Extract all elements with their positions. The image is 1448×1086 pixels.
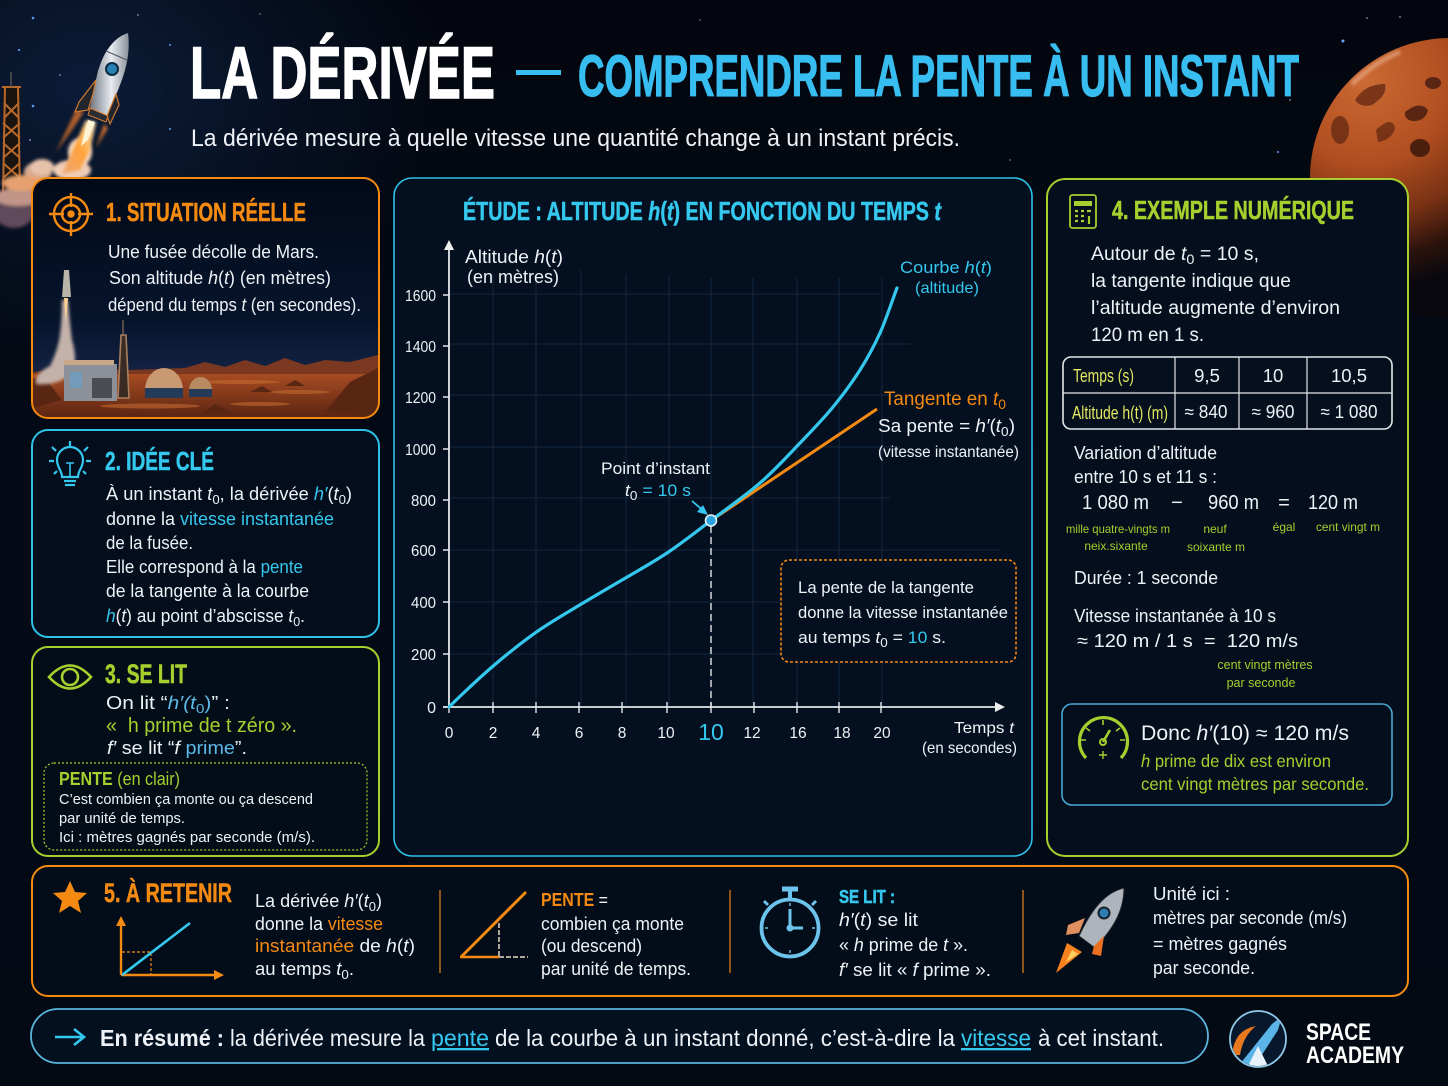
callout: pente en clair: C’est combien ça monte ou ça descend [59, 791, 313, 808]
y axis: 1400 [405, 339, 436, 356]
label: tangente [878, 389, 1019, 461]
label: point d'instant: 0 [630, 488, 637, 503]
result box: cent vingt mètres par seconde. [1141, 774, 1369, 794]
summary text: à cet instant. [1038, 1025, 1164, 1051]
logo: space academy: SPACE [1306, 1019, 1371, 1046]
label: courbe: (altitude) [915, 280, 979, 297]
title [190, 33, 1299, 114]
text block: de la tangente à la courbe [106, 581, 309, 601]
label: point d'instant: Point d’instant [601, 459, 710, 478]
text: dérivée: 0 [369, 899, 376, 914]
x axis: 10 [657, 725, 675, 742]
text: se lit: f′ se lit « f prime ». [839, 960, 991, 980]
intro text: l’altitude augmente d’environ [1091, 298, 1340, 319]
callout: pente de la tangente: La pente de la tangente [798, 578, 974, 597]
callout: pente en clair: Ici : mètres gagnés par seconde (m/s). [59, 829, 315, 846]
tangent line [711, 409, 877, 520]
intro text: 120 m en 1 s. [1091, 325, 1204, 346]
illustration: Mars planet [1310, 38, 1448, 318]
text: pente: (ou descend) [541, 936, 642, 956]
y axis: Altitude h(t) [465, 247, 563, 267]
x axis: 10 [698, 719, 724, 745]
text: dérivée: au temps t [255, 959, 341, 979]
text: dérivée: instantanée de h(t) [255, 936, 415, 956]
icon: stopwatch [762, 889, 818, 956]
chart title: ÉTUDE : ALTITUDE h(t) EN FONCTION DU TEMPS t [463, 196, 942, 226]
label: courbe: Courbe h(t) [900, 258, 992, 277]
table: ≈ 840 [1184, 401, 1228, 422]
curve h(t) [449, 288, 897, 707]
panel: 1 situation réelle [32, 178, 379, 418]
table: 10 [1263, 365, 1283, 386]
icon: slope triangle [460, 892, 528, 957]
heading: 4. EXEMPLE NUMÉRIQUE [1112, 195, 1354, 225]
text block [106, 484, 352, 629]
icon: rocket [1056, 888, 1124, 973]
point t0 [706, 515, 716, 526]
vitesse block: cent vingt mètres [1217, 658, 1313, 672]
text: unité: par seconde. [1153, 958, 1255, 978]
text block: À un instant t [106, 484, 212, 504]
variation block: Variation d’altitude [1074, 443, 1217, 463]
text: pente: PENTE = [541, 890, 608, 910]
arrow to point [692, 501, 708, 515]
intro text: Autour de t [1091, 244, 1186, 265]
y axis [405, 240, 563, 717]
label: tangente: 0 [1001, 424, 1009, 439]
text block: ” : [211, 693, 227, 713]
illustration: smoke cloud [0, 138, 92, 228]
text block: de la fusée. [106, 533, 193, 553]
summary text [100, 1025, 1164, 1051]
text: se lit: h′(t) se lit [839, 910, 918, 930]
callout: pente de la tangente: = [888, 628, 908, 647]
summary text: de la courbe à un instant donné, c’est-à-dire la [495, 1025, 955, 1051]
callout: pente de la tangente: 10 s. [908, 628, 945, 647]
y axis: (en mètres) [467, 267, 559, 287]
icon: star [53, 881, 87, 913]
vitesse block: Vitesse instantanée à 10 s [1074, 606, 1276, 626]
y axis: 600 [411, 543, 436, 560]
callout: pente de la tangente: au temps t [798, 628, 880, 647]
callout: pente en clair: PENTE (en clair) [59, 769, 180, 789]
table: 9,5 [1194, 365, 1220, 386]
illustration: launch tower [2, 72, 21, 195]
variation block: 1 080 m [1082, 492, 1149, 514]
y axis: 800 [411, 493, 436, 510]
subtitle: La dérivée mesure à quelle vitesse une quantité change à un instant précis. [191, 125, 960, 152]
x axis: 6 [575, 725, 583, 742]
x axis: 4 [532, 725, 541, 742]
text: se lit: SE LIT : [839, 887, 895, 907]
text: unité: mètres par seconde (m/s) [1153, 908, 1347, 928]
variation block: mille quatre-vingts m [1066, 522, 1170, 536]
text: unité: Unité ici : [1153, 884, 1230, 904]
table: ≈ 1 080 [1320, 401, 1378, 422]
text: dérivée: ) [376, 891, 382, 911]
text block: f′ se lit “ f prime”. [107, 738, 247, 758]
y axis: 0 [427, 700, 436, 717]
variation block: 960 m [1208, 492, 1259, 514]
callout: pente en clair: par unité de temps. [59, 810, 185, 827]
y axis: 1000 [405, 442, 436, 459]
text: dérivée: donne la vitesse [255, 914, 383, 934]
text block: Une fusée décolle de Mars. [108, 242, 319, 262]
title: LA DÉRIVÉE [190, 33, 495, 114]
intro text: = 10 s, [1194, 244, 1259, 265]
icon: arrow [55, 1029, 84, 1045]
label: tangente: Tangente en t [884, 389, 998, 410]
y axis: 200 [411, 647, 436, 664]
variation block: 120 m [1308, 492, 1358, 514]
variation block: = [1278, 492, 1290, 514]
text block: h′(t [314, 484, 339, 504]
intro text: la tangente indique que [1091, 271, 1291, 292]
text block [108, 242, 361, 315]
heading: 2. IDÉE CLÉ [105, 446, 214, 476]
y axis: 1600 [405, 288, 436, 305]
text block: donne la vitesse instantanée [106, 509, 334, 529]
table: 10,5 [1331, 365, 1367, 386]
text block: 0 [293, 614, 300, 629]
text block: 0 [212, 492, 220, 507]
label: courbe [900, 258, 992, 297]
icon: light bulb [49, 441, 91, 485]
text block: ) [204, 693, 211, 713]
text: unité: = mètres gagnés [1153, 934, 1287, 954]
panel: 5 à retenir [32, 866, 1408, 996]
intro text [1091, 244, 1340, 346]
variation block: − [1171, 492, 1183, 514]
table [1063, 357, 1392, 429]
icon: calculator [1070, 195, 1096, 228]
callout: pente de la tangente: 0 [880, 635, 888, 650]
y axis: 400 [411, 595, 436, 612]
text: dérivée [255, 891, 415, 982]
summary banner [31, 1009, 1208, 1063]
logo: space academy [1230, 1011, 1404, 1069]
x axis [443, 702, 1017, 757]
icon: gauge [1080, 718, 1128, 759]
text block: « h prime de t zéro ». [106, 715, 297, 737]
text block: dépend du temps t (en secondes). [108, 295, 361, 315]
text block: Son altitude h(t) (en mètres) [109, 268, 331, 288]
y axis: 1200 [405, 390, 436, 407]
callout: pente en clair [44, 763, 367, 850]
text block: On lit “ h′(t [106, 693, 192, 713]
text block [106, 693, 297, 758]
text: unité [1153, 884, 1347, 978]
text: se lit [839, 887, 991, 980]
variation block: cent vingt m [1316, 520, 1380, 534]
callout: pente de la tangente [781, 560, 1016, 662]
panel: 3 se lit [32, 647, 379, 856]
text: dérivée: 0 [341, 967, 349, 982]
summary text: vitesse [961, 1025, 1031, 1051]
text block: h(t) au point d’abscisse t [106, 606, 293, 626]
label: tangente: ) [1009, 416, 1015, 436]
text: pente: combien ça monte [541, 914, 684, 934]
variation block: neix.sixante [1084, 539, 1148, 553]
result box: Donc h′(10) ≈ 120 m/s [1141, 722, 1349, 745]
label: tangente: (vitesse instantanée) [878, 444, 1019, 461]
x axis: Temps t [954, 720, 1015, 737]
mini chart [116, 916, 224, 980]
heading: 3. SE LIT [105, 659, 187, 689]
vitesse block [1074, 606, 1313, 690]
variation block: entre 10 s et 11 s : [1074, 467, 1217, 487]
logo: space academy: ACADEMY [1306, 1042, 1404, 1069]
intro text: 0 [1186, 251, 1195, 267]
text: dérivée: . [349, 959, 354, 979]
text: pente: par unité de temps. [541, 959, 691, 979]
x axis: 0 [445, 725, 454, 742]
variation block [1066, 443, 1380, 554]
vitesse block: ≈ 120 m / 1 s = 120 m/s [1077, 630, 1298, 651]
panel: 2 idée clé [32, 430, 379, 637]
text block: Elle correspond à la pente [106, 557, 303, 577]
text block: 0 [196, 701, 204, 716]
x axis: 16 [789, 725, 807, 742]
icon: eye [49, 666, 91, 688]
x axis: 12 [743, 725, 761, 742]
label: tangente: 0 [998, 396, 1006, 412]
icon: target [49, 193, 93, 236]
text block: . [300, 606, 305, 626]
illustration: rocket [56, 33, 129, 174]
text: dérivée: La dérivée h′(t [255, 891, 369, 911]
x axis: 20 [873, 725, 891, 742]
table: Temps (s) [1073, 366, 1134, 386]
summary text: En résumé : la dérivée mesure la [100, 1025, 425, 1051]
x axis: 18 [833, 725, 851, 742]
text: pente [541, 890, 691, 979]
x axis: 8 [618, 725, 626, 742]
dashed instant line [710, 526, 712, 707]
vitesse block: par seconde [1227, 676, 1295, 690]
x axis: 2 [489, 725, 497, 742]
text: se lit: « h prime de t ». [839, 935, 968, 955]
heading: 1. SITUATION RÉELLE [106, 197, 306, 227]
panel: 4 exemple numérique [1047, 179, 1408, 856]
table: ≈ 960 [1252, 401, 1294, 422]
summary text: pente [431, 1025, 489, 1051]
text block: ) [346, 484, 352, 504]
callout: pente de la tangente: donne la vitesse instantanée [798, 603, 1008, 622]
illustration: Mars base landscape [33, 237, 378, 417]
label: point d'instant: t [625, 481, 631, 500]
variation block: égal [1273, 520, 1295, 534]
x axis: (en secondes) [922, 740, 1017, 757]
text block: 0 [339, 492, 346, 507]
label: tangente: Sa pente = h′(t [878, 416, 1001, 436]
durée: Durée : 1 seconde [1074, 567, 1218, 588]
line chart [405, 240, 1019, 757]
label: point d'instant: = 10 s [637, 481, 691, 500]
result box [1062, 704, 1392, 805]
table: Altitude h(t) (m) [1072, 403, 1168, 423]
variation block: neuf [1203, 522, 1227, 536]
text block: , la dérivée [220, 484, 314, 504]
result box: h prime de dix est environ [1141, 751, 1331, 771]
heading: 5. À RETENIR [104, 877, 232, 908]
label: point d'instant [601, 459, 710, 503]
variation block: soixante m [1187, 540, 1245, 554]
panel: chart [394, 178, 1032, 856]
